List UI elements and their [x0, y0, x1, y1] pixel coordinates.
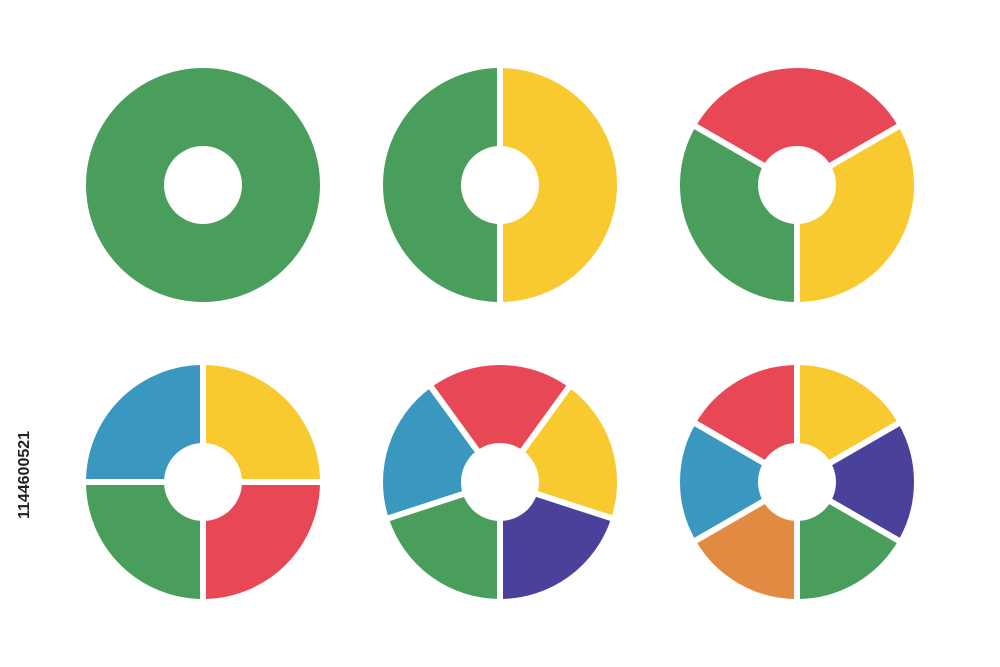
- chart: 5 segment ring: [380, 362, 620, 602]
- chart: 2 segment ring: [380, 65, 620, 305]
- side id text: 1144600521: [16, 431, 33, 519]
- chart: 4 segment ring: [83, 362, 323, 602]
- chart: 6 segment ring: [677, 362, 917, 602]
- chart: 1 segment ring: [86, 68, 320, 302]
- chart: 3 segment ring: [677, 65, 917, 305]
